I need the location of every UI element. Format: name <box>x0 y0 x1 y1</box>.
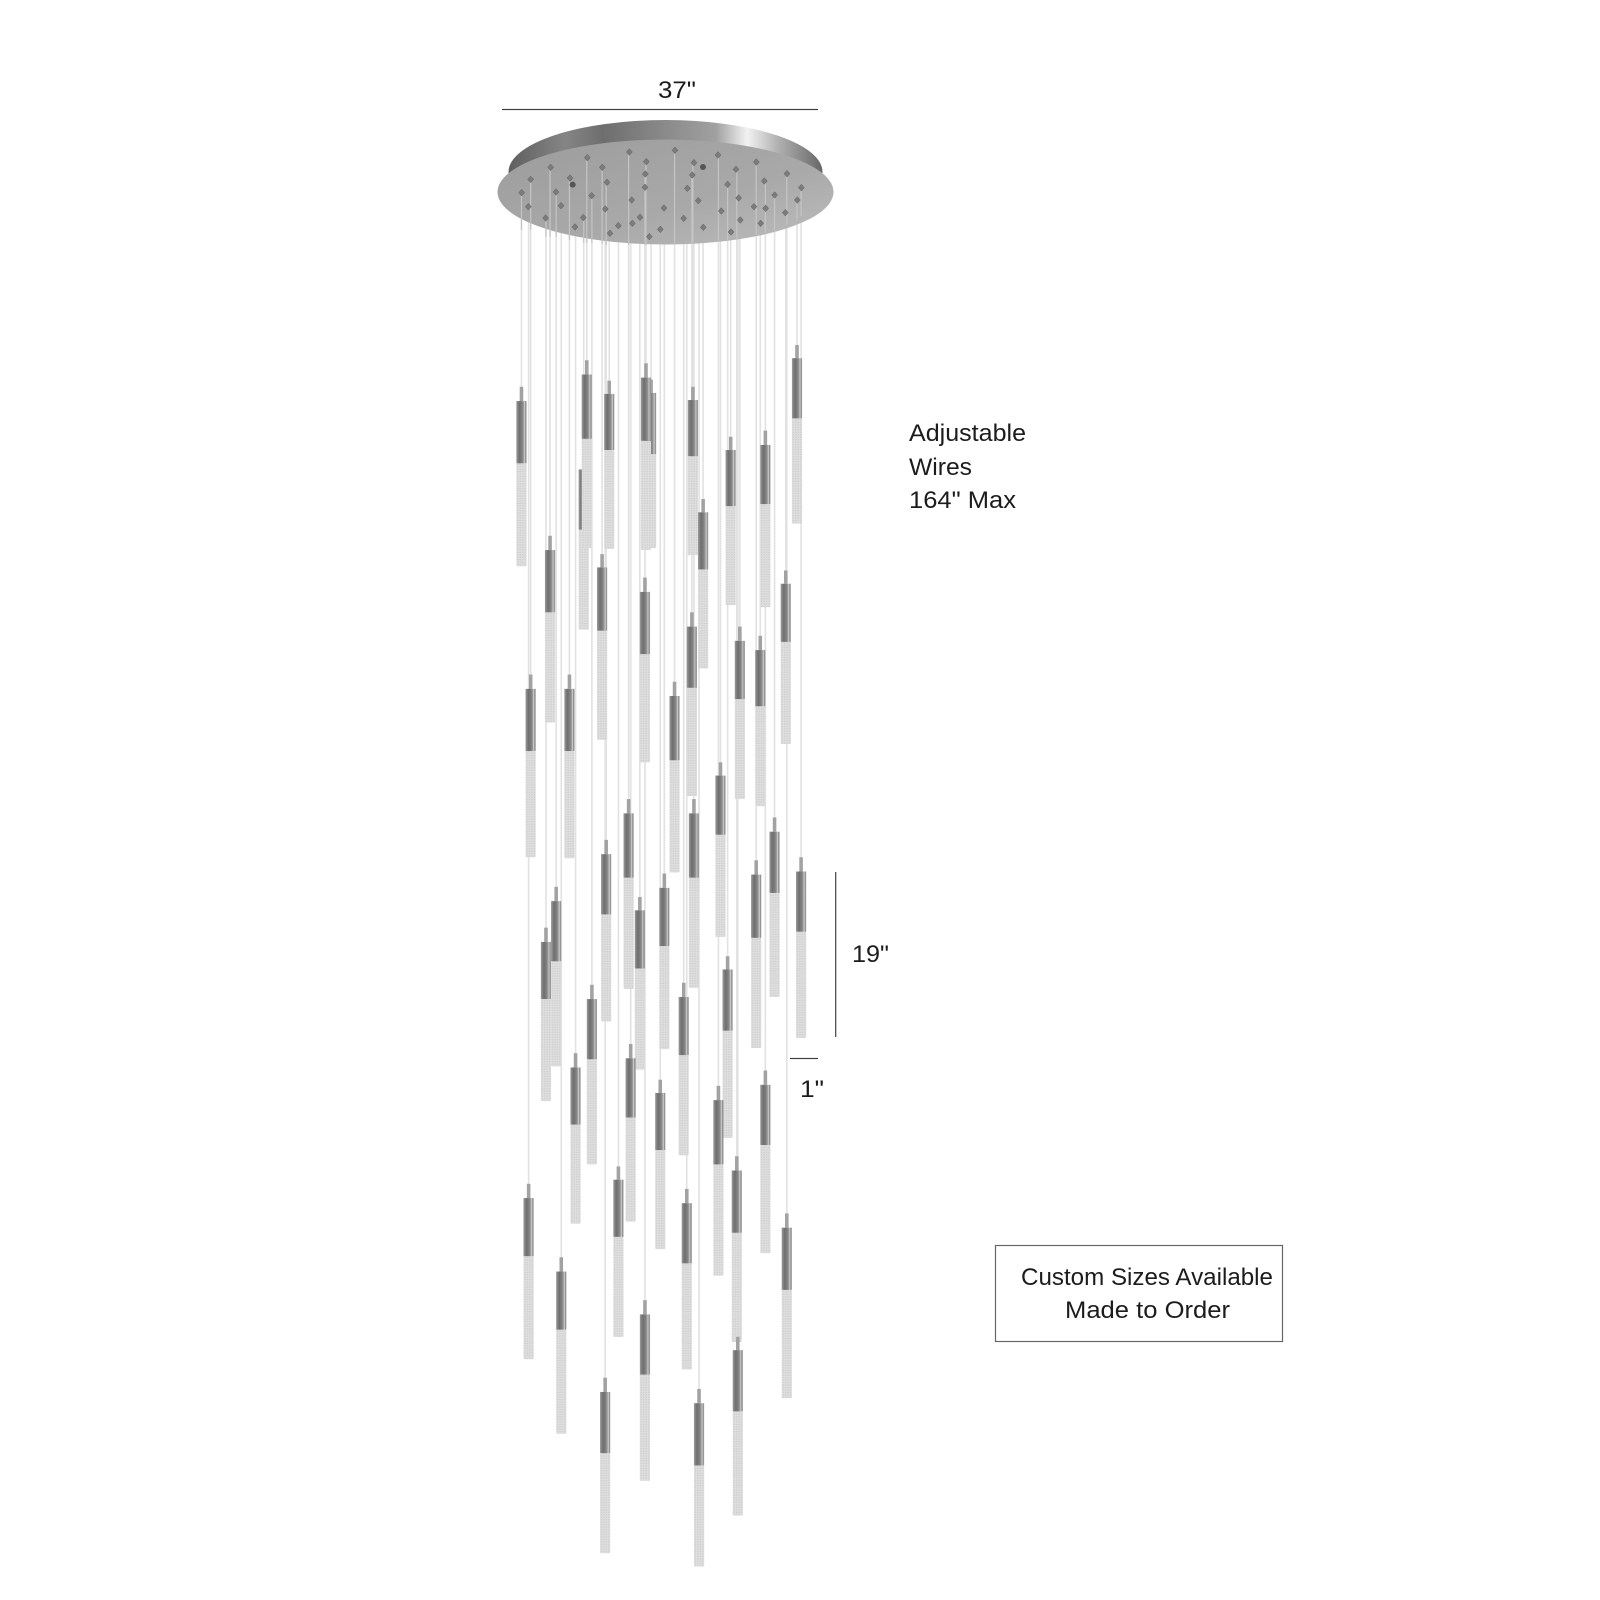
pendant N <box>735 627 745 799</box>
dimension: pendant length 19 inches: 19" <box>852 941 889 968</box>
pendant E <box>688 387 698 555</box>
pendant AQ <box>782 1213 792 1398</box>
pendant I <box>698 499 708 668</box>
pendant AE <box>723 956 733 1138</box>
callout: custom sizes <box>996 1246 1282 1342</box>
pendant AP <box>524 1184 534 1359</box>
pendant AO <box>682 1189 692 1370</box>
pendant AC <box>551 887 561 1066</box>
pendant behind, upper left <box>579 456 589 630</box>
pendant P <box>781 570 791 744</box>
pendant A <box>516 387 527 566</box>
pendant AA <box>659 874 669 1049</box>
label: adjustable wires: Wires <box>909 454 972 481</box>
pendant AJ <box>655 1080 665 1249</box>
pendant AL <box>760 1071 770 1253</box>
label: adjustable wires <box>909 420 1026 514</box>
pendant AV <box>694 1389 704 1566</box>
pendant W <box>601 840 611 1022</box>
pendant V <box>689 799 699 988</box>
pendant lights cluster <box>516 345 806 1566</box>
pendant O <box>755 636 765 806</box>
suspension wires <box>521 150 801 1389</box>
dimension: pendant diameter 1 inch: 1" <box>800 1076 824 1103</box>
pendant C <box>604 381 614 549</box>
pendant AN <box>613 1166 624 1337</box>
callout: custom sizes: Custom Sizes Available <box>1021 1264 1273 1291</box>
pendant F <box>726 437 736 605</box>
pendant X <box>769 817 780 997</box>
pendant U <box>624 799 634 989</box>
pendant D <box>641 363 651 550</box>
dimension: plate width 37 inches: 37" <box>658 77 696 104</box>
pendant AM <box>732 1156 742 1342</box>
pendant S <box>669 682 680 873</box>
pendant J <box>545 536 555 723</box>
pendant Q <box>526 675 536 857</box>
pendant Y <box>751 860 761 1048</box>
pendant G <box>760 431 770 607</box>
pendant AU <box>600 1378 610 1553</box>
pendant AB <box>541 928 551 1101</box>
pendant AI <box>626 1044 636 1222</box>
dimension: pendant diameter 1 inch <box>790 1058 824 1103</box>
pendant AH <box>570 1053 581 1224</box>
pendant AG <box>679 983 689 1155</box>
pendant M <box>687 612 697 796</box>
pendant K <box>597 554 607 740</box>
pendant AF <box>587 985 597 1164</box>
label: adjustable wires: Adjustable <box>909 420 1026 447</box>
pendant Z <box>796 857 806 1038</box>
pendant B <box>582 360 592 548</box>
pendant T <box>715 762 726 937</box>
pendant behind, upper centre <box>646 380 656 548</box>
pendant AK <box>713 1086 724 1276</box>
callout: custom sizes: Made to Order <box>1065 1297 1230 1324</box>
pendant AT <box>733 1337 743 1515</box>
pendant AR <box>556 1257 566 1434</box>
label: adjustable wires: 164" Max <box>909 487 1016 514</box>
pendant H <box>792 345 802 524</box>
pendant R <box>564 675 575 858</box>
pendant AS <box>640 1300 650 1481</box>
ceiling canopy plate <box>498 120 834 245</box>
pendant AD <box>635 897 645 1069</box>
pendant L <box>640 578 650 762</box>
